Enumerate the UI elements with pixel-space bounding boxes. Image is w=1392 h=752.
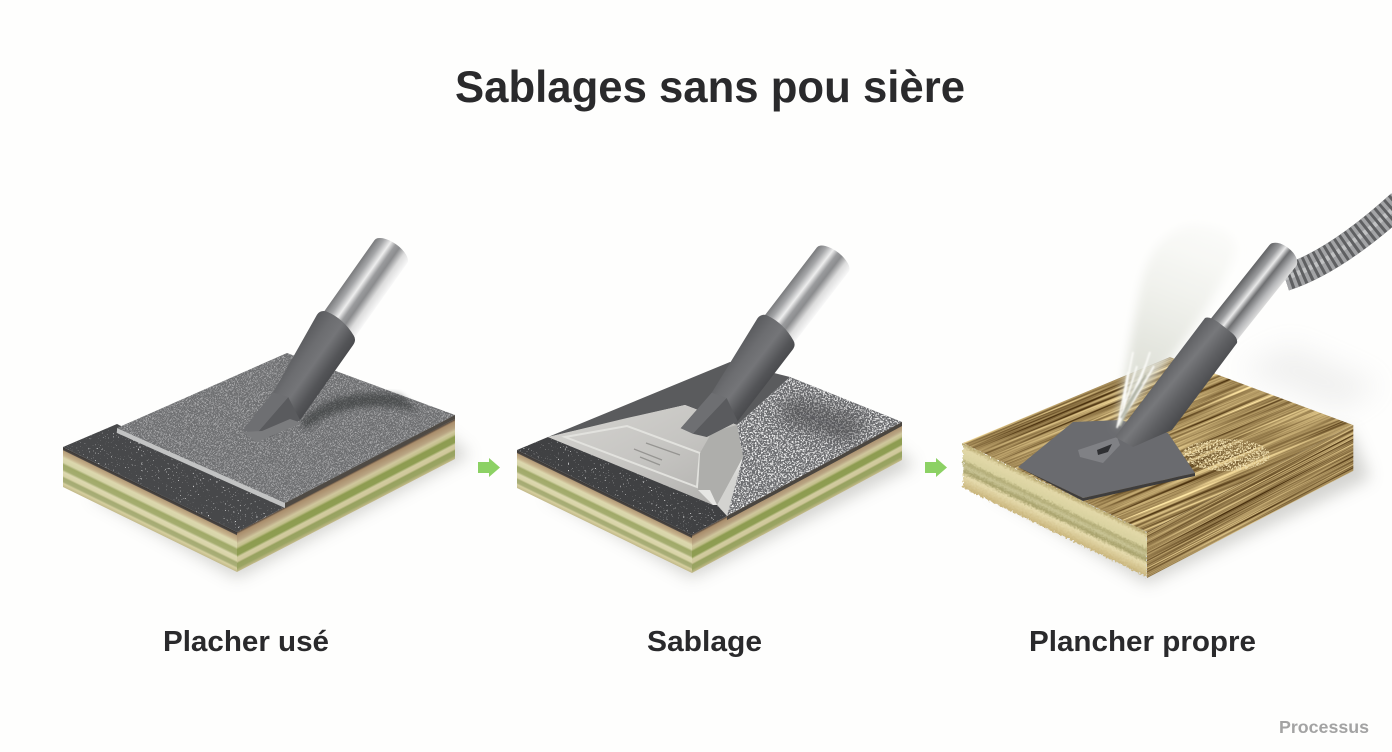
plate collar — [1078, 437, 1120, 463]
dust streaks — [1117, 352, 1154, 428]
small plate markings — [634, 443, 680, 465]
right layered edge — [692, 422, 902, 573]
panel: worn floor — [60, 230, 470, 578]
wood top face — [963, 357, 1353, 532]
panel: sanding — [515, 238, 915, 578]
panel: clean floor — [924, 203, 1392, 584]
dark surface back — [548, 362, 790, 437]
worn dark top layer — [63, 424, 285, 532]
abrasive sheet edge — [117, 428, 285, 508]
title: Sablages sans pou sière — [455, 63, 965, 112]
nozzle cast shadow — [1240, 345, 1380, 410]
dust-free darker band — [775, 395, 870, 445]
pentagon base plate — [1018, 420, 1195, 498]
dark surface front — [517, 437, 727, 535]
plate fold — [698, 425, 743, 505]
end grain face — [963, 443, 1147, 577]
nozzle — [676, 238, 856, 453]
label: worn floor: Placher usé — [163, 626, 329, 658]
nozzle chrome tube — [1208, 238, 1302, 343]
left layered edge — [517, 450, 692, 573]
wood side face — [1147, 425, 1353, 578]
nozzle — [238, 230, 415, 454]
silver scraper plate — [548, 405, 743, 505]
label: clean floor: Plancher propre — [1029, 626, 1256, 658]
base plate — [243, 419, 302, 442]
corrugated hose — [1285, 203, 1392, 278]
arrow 2 — [925, 458, 947, 477]
left layered edge — [63, 447, 237, 572]
abrasive sheet — [117, 353, 455, 503]
right layered edge — [237, 419, 455, 572]
arrow 1 — [478, 458, 500, 477]
dust plume — [1117, 225, 1235, 430]
block shadow — [90, 430, 470, 578]
nozzle sleeve — [1115, 318, 1237, 447]
block shadow — [990, 430, 1370, 584]
nozzle shadow — [300, 393, 420, 430]
watermark: Processus — [1279, 717, 1369, 737]
sawdust pile — [1182, 439, 1270, 471]
block shadow — [545, 440, 915, 578]
label: sanding: Sablage — [647, 626, 762, 658]
sanded right zone — [727, 377, 902, 516]
